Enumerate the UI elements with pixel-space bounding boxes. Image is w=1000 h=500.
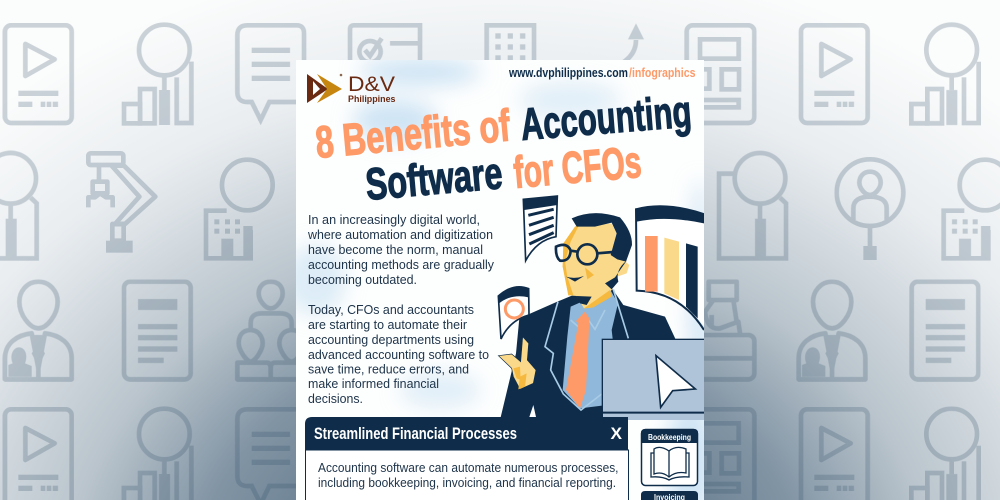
intro text: Today, CFOs and accountants bbox=[308, 302, 474, 317]
icon: person in magnifier bbox=[837, 159, 903, 246]
intro text: make informed financial bbox=[308, 376, 439, 391]
icon: magnifier document, left bbox=[0, 153, 37, 258]
icon: magnifier chart, row 4 right bbox=[911, 409, 979, 500]
icon: person magnifier handle bbox=[863, 246, 877, 260]
laptop bbox=[602, 339, 709, 423]
bar chart panel bbox=[636, 205, 707, 330]
close X: X bbox=[610, 424, 623, 443]
title: 8 Benefits of bbox=[313, 99, 513, 168]
icon: speech bubble, row 4 bbox=[237, 409, 304, 500]
title bbox=[313, 85, 693, 210]
intro text: where automation and digitization bbox=[307, 227, 493, 242]
logo: D&V Philippines: Philippines bbox=[348, 94, 396, 105]
intro text bbox=[307, 212, 494, 406]
title: Accounting bbox=[519, 85, 693, 150]
icon: document, row 3 right bbox=[912, 282, 978, 379]
icon: magnifier building, left bbox=[206, 160, 273, 259]
logo: D&V Philippines bbox=[307, 73, 396, 105]
illustration: CFO with charts and laptop bbox=[498, 196, 709, 423]
icon: robot arm bbox=[88, 153, 155, 241]
icon: businessman, row 3 right bbox=[799, 282, 865, 379]
tie bbox=[566, 312, 589, 408]
icon: magnifier chart, row 1 right bbox=[911, 25, 979, 125]
panel heading: Streamlined Financial Processes bbox=[314, 424, 517, 443]
sidebar: invoicing tile bbox=[641, 491, 698, 500]
icon: magnifier chart, row 4 left bbox=[124, 409, 191, 500]
icon: speech bubble, row 1 bbox=[237, 25, 304, 120]
intro text: have become the norm, manual bbox=[308, 242, 483, 257]
intro text: are starting to automate their bbox=[308, 317, 468, 332]
intro text: save time, reduce errors, and bbox=[308, 362, 469, 376]
title: for CFOs bbox=[511, 136, 643, 198]
icon: seated group bbox=[237, 282, 305, 379]
panel: infographic card bbox=[285, 58, 714, 500]
icon: businessman, row 3 left bbox=[5, 282, 72, 379]
icon: document, row 3 left bbox=[124, 282, 191, 379]
glasses bbox=[556, 244, 613, 264]
website url: /infographics bbox=[629, 66, 696, 80]
icon: calculator panel, row 1 bbox=[687, 25, 754, 123]
icon: video document, row 4 left bbox=[5, 409, 72, 500]
lapels bbox=[545, 289, 628, 410]
icon: growth arrow top bbox=[610, 23, 644, 68]
icon: video document, row 1 right bbox=[801, 25, 868, 123]
intro text: decisions. bbox=[308, 391, 363, 406]
hand bbox=[498, 337, 536, 389]
icon: calculator panel, row 4 bbox=[687, 409, 754, 500]
panel: streamlined financial processes bbox=[305, 417, 628, 500]
intro text: becoming outdated. bbox=[308, 272, 417, 287]
icon: magnifier document, right bbox=[719, 153, 786, 258]
mouth bbox=[566, 276, 584, 282]
icon: magnifier chart, row 1 bbox=[124, 25, 191, 125]
panel header bar bbox=[305, 417, 628, 500]
neck and face bbox=[563, 223, 629, 308]
hair bbox=[572, 213, 632, 262]
sidebar: bookkeeping tile: Bookkeeping bbox=[648, 432, 691, 442]
panel: streamlined financial processes: including bookkeeping, invoicing, and financial reporting. bbox=[318, 475, 616, 490]
icon: checklist document top bbox=[350, 25, 420, 80]
website url: www.dvphilippines.com bbox=[508, 66, 628, 80]
icon: office block top bbox=[487, 25, 534, 92]
pale blue cloud texture bbox=[285, 58, 714, 500]
logo: D&V Philippines: D&V bbox=[348, 73, 395, 96]
floating badge bbox=[498, 287, 529, 339]
sidebar: bookkeeping tile bbox=[641, 429, 698, 486]
icon: video document, row 1 bbox=[5, 25, 72, 123]
intro text: advanced accounting software to bbox=[308, 347, 489, 362]
intro text: accounting departments using bbox=[308, 332, 474, 347]
icon: hand on stacked coins bbox=[687, 282, 754, 379]
icon: video document, row 4 right bbox=[801, 409, 868, 500]
jacket bbox=[500, 289, 680, 420]
icon: magnifier building, right bbox=[944, 160, 1000, 259]
floating document bbox=[523, 196, 557, 261]
title: Software bbox=[363, 147, 504, 210]
intro text: accounting methods are gradually bbox=[308, 257, 494, 272]
icon: open book bbox=[651, 447, 689, 480]
panel body bbox=[306, 450, 628, 500]
shirt bbox=[563, 289, 620, 408]
intro text: In an increasingly digital world, bbox=[308, 212, 480, 227]
icon: robot arm base bbox=[106, 241, 133, 253]
panel text: Accounting software can automate numerous processes, bbox=[318, 460, 618, 475]
